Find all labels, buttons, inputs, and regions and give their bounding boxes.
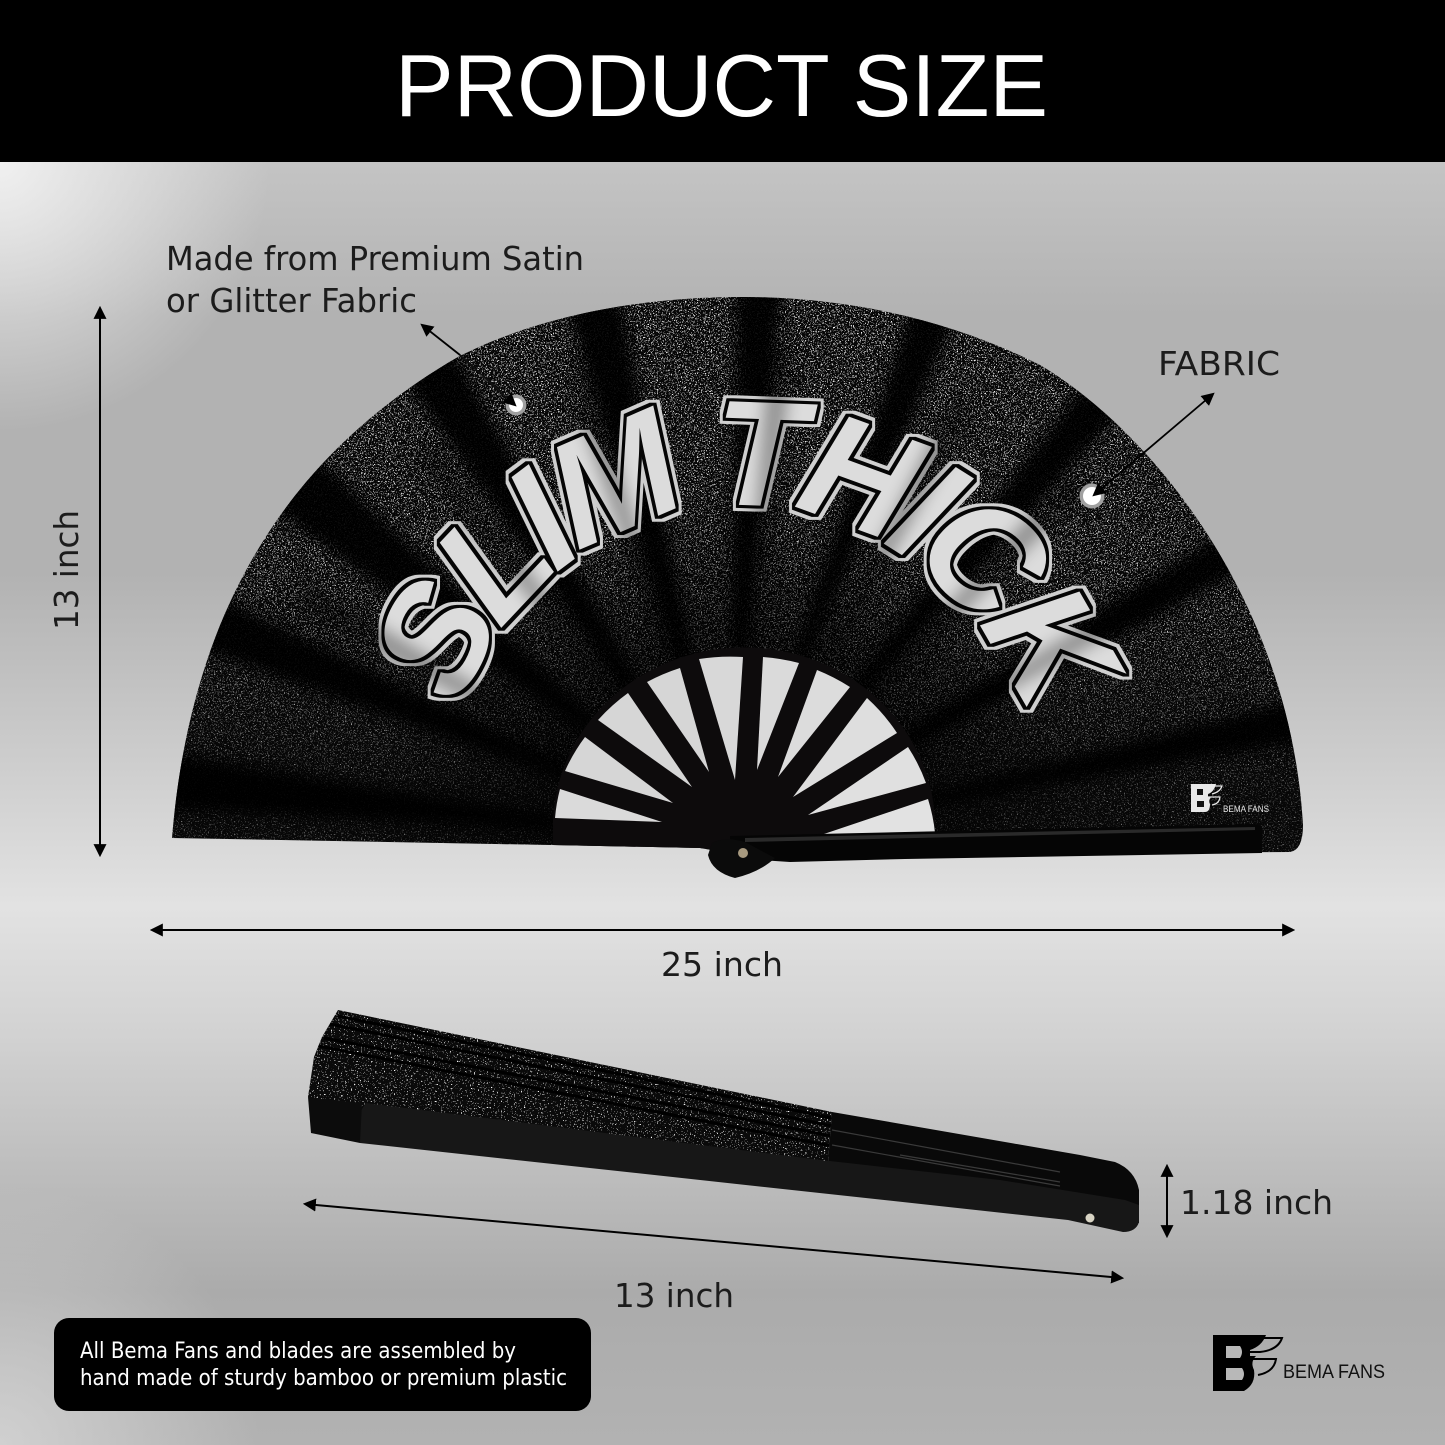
- title: PRODUCT SIZE: [395, 36, 1048, 135]
- open fan: [172, 297, 1303, 878]
- closed fan rivet: [1086, 1214, 1094, 1222]
- bamboo rib hub: [553, 647, 935, 860]
- note box: hand made of sturdy bamboo or premium plastic: [80, 1366, 567, 1391]
- brand logo: BEMA FANS: [1283, 1362, 1385, 1383]
- thickness label: 1.18 inch: [1180, 1183, 1333, 1222]
- closed fan: [300, 1000, 1139, 1232]
- fabric callout arrow: [1094, 394, 1213, 495]
- fabric eyelet right: [1080, 484, 1104, 508]
- closed fan glitter blades: [308, 1010, 832, 1161]
- thickness arrow: [1166, 1166, 1168, 1236]
- closed fan guard: [360, 1103, 1139, 1232]
- closed length arrow: [305, 1204, 1122, 1278]
- material callout text: or Glitter Fabric: [166, 281, 417, 320]
- small brand mark on fan: [1191, 784, 1269, 815]
- brand logo: [1213, 1335, 1385, 1391]
- pivot: [708, 839, 775, 878]
- width arrow: [152, 929, 1293, 931]
- material callout text: [166, 239, 584, 320]
- material callout text: Made from Premium Satin: [166, 239, 584, 278]
- note box: [54, 1318, 591, 1411]
- title banner: [0, 0, 1445, 162]
- fan handle: [708, 824, 1262, 878]
- closed fan base block: [308, 1097, 362, 1143]
- small brand mark on fan: BEMA FANS: [1223, 804, 1269, 815]
- fan slogan: SLIM THICK: [378, 395, 1132, 713]
- height label: 13 inch: [47, 510, 86, 630]
- rivet: [738, 848, 748, 858]
- width label: 25 inch: [661, 945, 783, 984]
- material callout arrows: [422, 325, 515, 405]
- fabric callout label: FABRIC: [1158, 344, 1280, 383]
- pleat shadows: [174, 297, 1294, 838]
- slogan fold shading: [286, 336, 1158, 755]
- closed fan ribs: [828, 1112, 1139, 1223]
- fan fabric: [172, 297, 1303, 852]
- height arrow: [99, 308, 101, 855]
- note box: All Bema Fans and blades are assembled by: [80, 1339, 516, 1364]
- fabric eyelet left: [506, 394, 526, 416]
- closed length label: 13 inch: [614, 1276, 734, 1315]
